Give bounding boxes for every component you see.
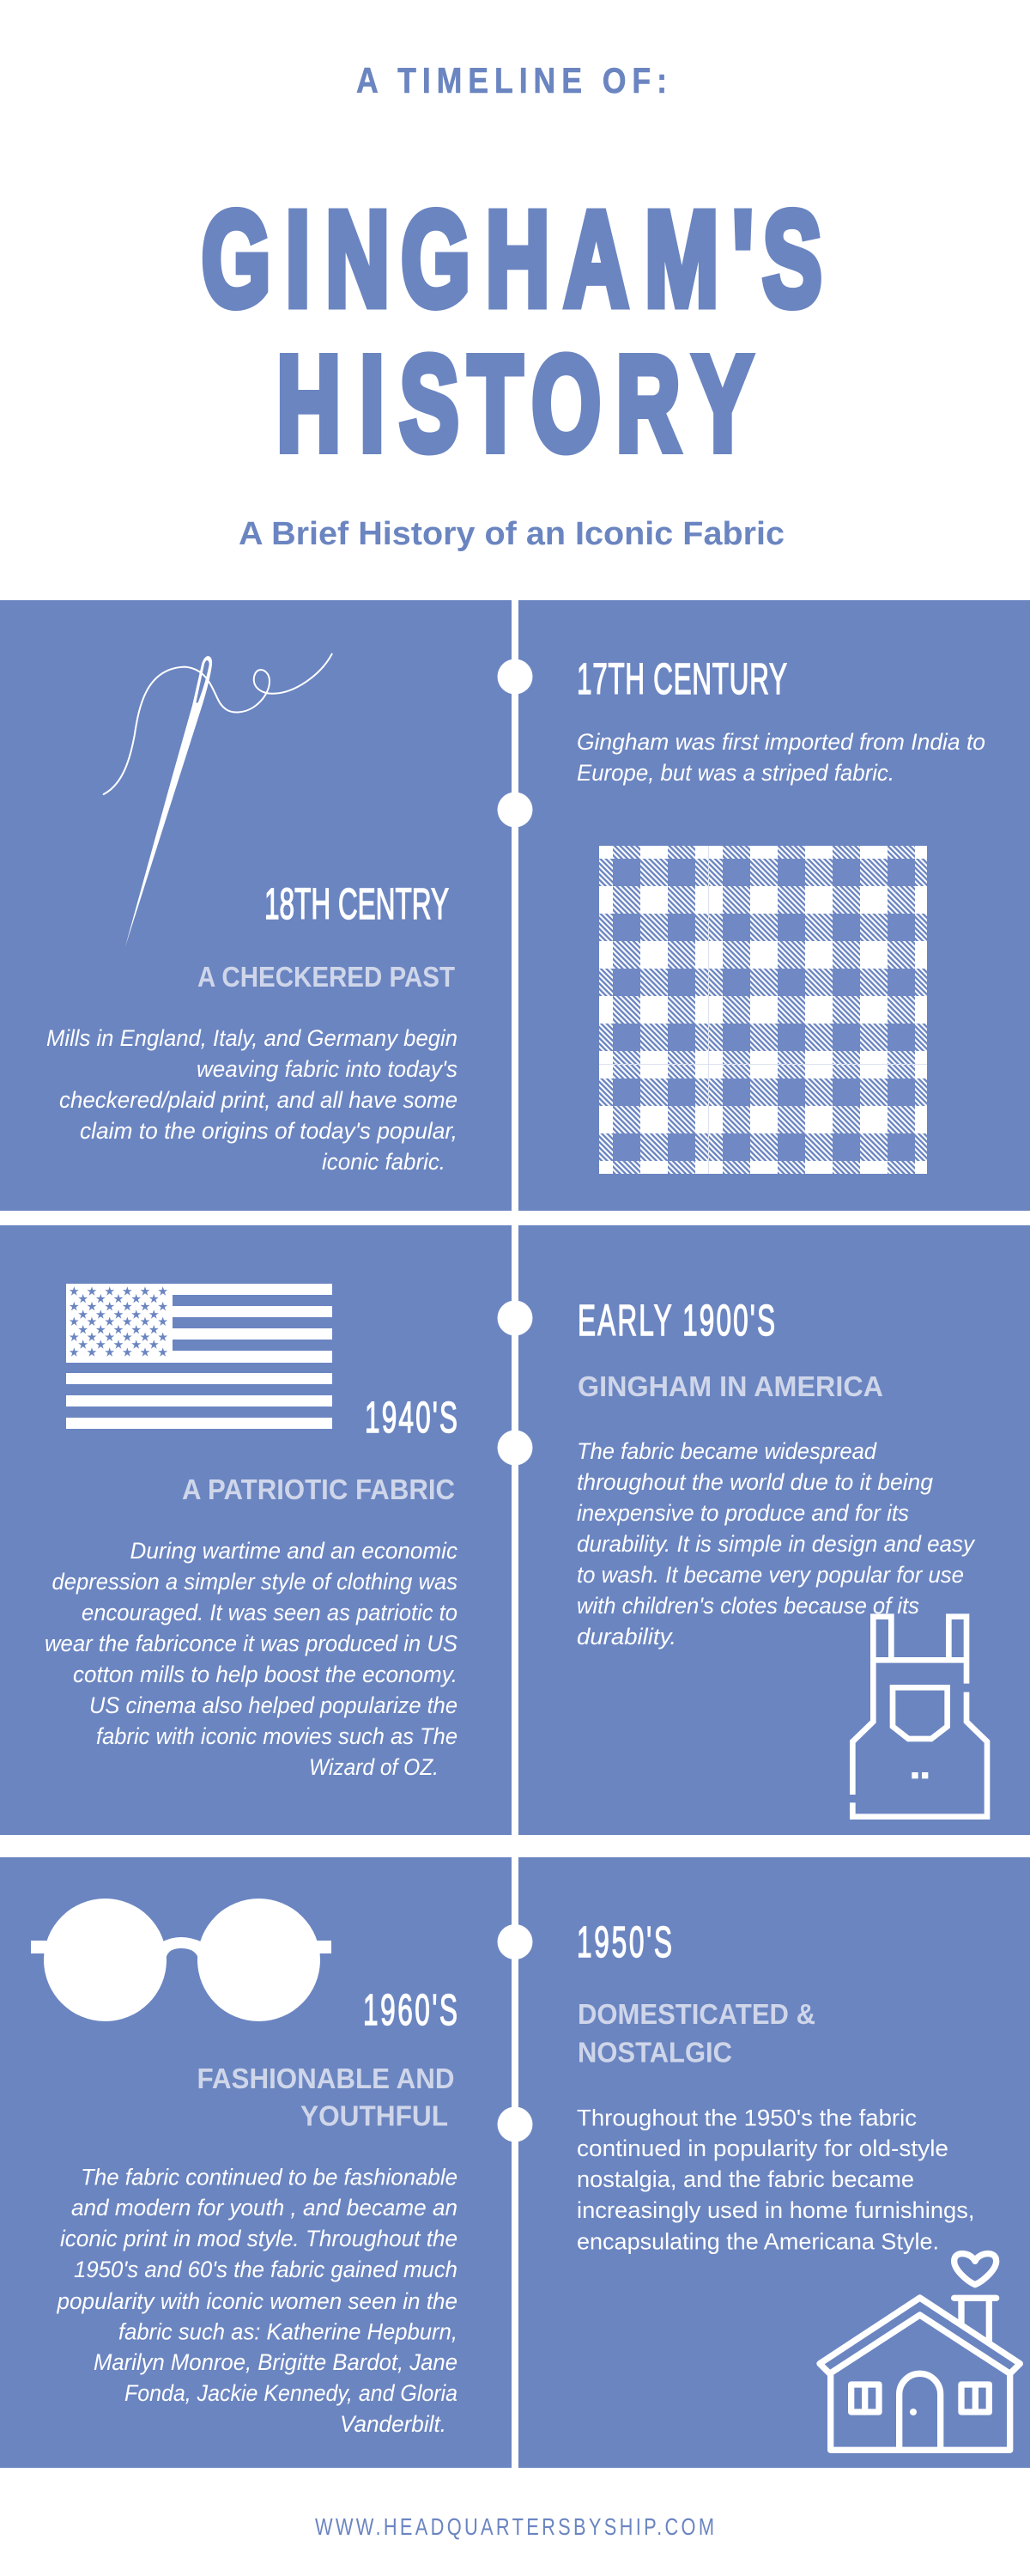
subheading: a checkered past: A CHECKERED PAST xyxy=(197,961,455,993)
body text: continued in popularity for old-style xyxy=(577,2136,948,2161)
body text: durability. It is simple in design and easy xyxy=(577,1531,975,1557)
body text: During wartime and an economic xyxy=(130,1538,457,1564)
heading: 17th century: 17TH CENTURY xyxy=(577,654,787,703)
body text: iconic print in mod style. Throughout the xyxy=(60,2226,457,2251)
heading: 1960's: 1960'S xyxy=(363,1985,457,2034)
icon: overalls xyxy=(852,1617,987,1817)
body text: Mills in England, Italy, and Germany begin xyxy=(46,1025,457,1051)
body text: Wizard of OZ. xyxy=(309,1754,439,1780)
title line: Gingham's: GINGHAM'S xyxy=(202,185,822,335)
panel: 18th century (left, row 1) xyxy=(0,600,512,1211)
body text: iconic fabric. xyxy=(322,1149,445,1175)
body text: claim to the origins of today's popular, xyxy=(80,1118,457,1144)
body text: encouraged. It was seen as patriotic to xyxy=(82,1600,457,1625)
body text: cotton mills to help boost the economy. xyxy=(73,1662,457,1687)
panel: early 1900's (right, row 2) xyxy=(518,1225,1030,1835)
eyebrow: a timeline of: A TIMELINE OF: xyxy=(356,61,667,101)
body text xyxy=(57,2165,457,2437)
body text xyxy=(577,2105,975,2255)
body text xyxy=(577,1438,975,1649)
body text: fabric such as: Katherine Hepburn, xyxy=(118,2319,457,2345)
body text: checkered/plaid print, and all have some xyxy=(59,1087,457,1113)
icon: needle and thread xyxy=(104,654,332,947)
subheading: fashionable and youthful xyxy=(197,2063,455,2131)
body text: fabric with iconic movies such as The xyxy=(96,1723,457,1749)
body text: Vanderbilt. xyxy=(340,2411,446,2437)
subheading: domesticated and nostalgic: DOMESTICATED & xyxy=(578,1998,815,2030)
icon: house with heart smoke xyxy=(820,2254,1020,2450)
subheading: fashionable and youthful: FASHIONABLE AND xyxy=(197,2063,455,2094)
panel: 1950's (right, row 3) xyxy=(518,1857,1030,2468)
body text: weaving fabric into today's xyxy=(197,1056,457,1082)
body text: inexpensive to produce and for its xyxy=(577,1500,909,1526)
body text xyxy=(45,1538,457,1780)
header: title block xyxy=(202,61,822,552)
body text xyxy=(46,1025,457,1175)
gingham swatch xyxy=(599,846,927,1174)
title line: History: HISTORY xyxy=(276,330,752,479)
body text: 1950's and 60's the fabric gained much xyxy=(74,2257,457,2282)
subheading: fashionable and youthful: YOUTHFUL xyxy=(300,2100,448,2131)
subheading: domesticated and nostalgic: NOSTALGIC xyxy=(578,2037,732,2068)
body text: with children's clotes because of its xyxy=(577,1593,919,1619)
subtitle: A Brief History of an Iconic Fabric xyxy=(239,516,785,552)
panel: 17th century (right, row 1) xyxy=(518,600,1030,1211)
body text: depression a simpler style of clothing was xyxy=(52,1569,457,1595)
body text: Fonda, Jackie Kennedy, and Gloria xyxy=(124,2380,457,2406)
body text xyxy=(577,729,985,786)
body text: The fabric continued to be fashionable xyxy=(81,2165,457,2190)
body text: Gingham was first imported from India to xyxy=(577,729,985,755)
panel: 1940's (left, row 2) xyxy=(0,1225,512,1835)
subheading: domesticated and nostalgic xyxy=(578,1998,815,2068)
panel: 1960's (left, row 3) xyxy=(0,1857,512,2468)
body text: wear the fabriconce it was produced in US xyxy=(45,1631,457,1656)
body text: The fabric became widespread xyxy=(577,1438,877,1464)
body text: Throughout the 1950's the fabric xyxy=(577,2105,917,2131)
body text: popularity with iconic women seen in the xyxy=(57,2288,457,2314)
icon: american flag xyxy=(66,1284,332,1429)
body text: Europe, but was a striped fabric. xyxy=(577,760,894,786)
body text: Marilyn Monroe, Brigitte Bardot, Jane xyxy=(94,2349,457,2375)
subheading: gingham in america: GINGHAM IN AMERICA xyxy=(578,1370,883,1402)
icon: round sunglasses xyxy=(31,1899,331,2021)
body text: and modern for youth , and became an xyxy=(71,2195,457,2221)
body text: encapsulating the Americana Style. xyxy=(577,2229,939,2255)
timeline: divider line and nodes xyxy=(498,600,532,2468)
body text: throughout the world due to it being xyxy=(577,1469,933,1495)
heading: 1940's: 1940'S xyxy=(365,1393,457,1442)
body text: increasingly used in home furnishings, xyxy=(577,2197,975,2223)
heading: 1950's: 1950'S xyxy=(577,1917,672,1966)
body text: durability. xyxy=(577,1624,676,1649)
subheading: a patriotic fabric: A PATRIOTIC FABRIC xyxy=(182,1473,455,1505)
heading: 18th centry: 18TH CENTRY xyxy=(264,879,449,928)
body text: to wash. It became very popular for use xyxy=(577,1562,964,1588)
footer url: WWW.HEADQUARTERSBYSHIP.COM xyxy=(315,2513,714,2541)
body text: nostalgia, and the fabric became xyxy=(577,2166,914,2192)
heading: early 1900's: EARLY 1900'S xyxy=(578,1296,775,1345)
body text: US cinema also helped popularize the xyxy=(89,1692,457,1718)
